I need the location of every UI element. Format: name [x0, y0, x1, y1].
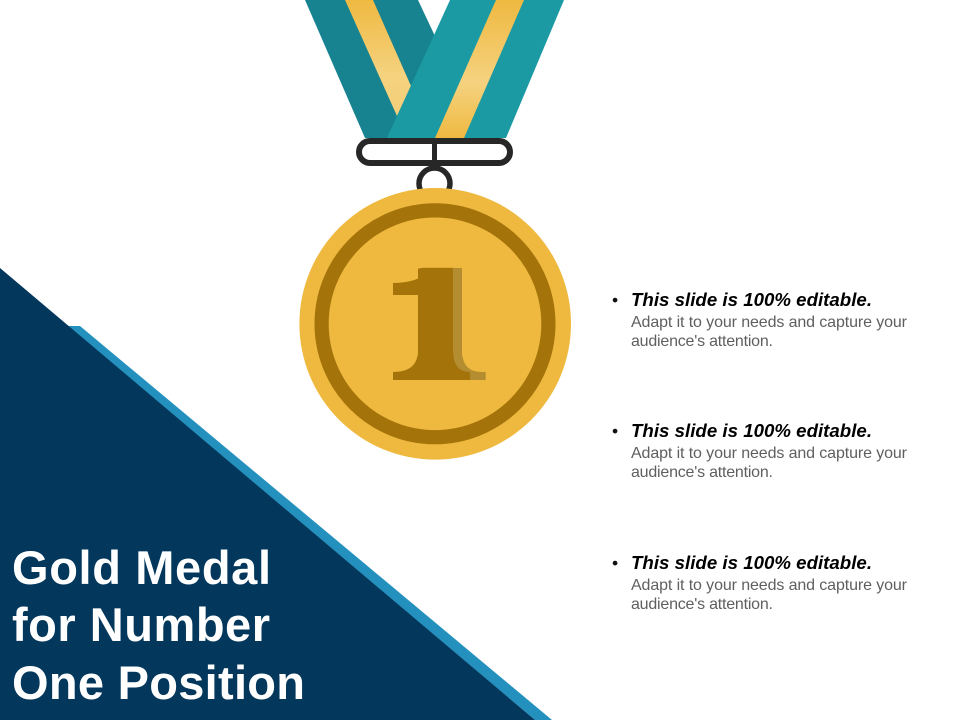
bullet item 1: •	[612, 290, 618, 310]
bullet item 2: •	[612, 421, 618, 441]
ribbon: front strap	[387, 0, 564, 138]
bullet item 3	[612, 552, 908, 613]
background corner panel	[0, 268, 552, 720]
bullet item 1: This slide is 100% editable.	[631, 289, 872, 310]
bullet item 3: audience's attention.	[631, 596, 773, 613]
bullet item 2	[612, 420, 908, 481]
bullet item 3: This slide is 100% editable.	[631, 552, 872, 573]
number one	[393, 268, 486, 380]
medal disc	[299, 188, 571, 460]
ribbon back gold stripe	[345, 0, 411, 116]
title: One Position	[12, 656, 305, 709]
clasp bar	[359, 141, 510, 166]
bullet item 1	[612, 289, 908, 350]
title: Gold Medal	[12, 541, 271, 594]
bullet item 1: audience's attention.	[631, 333, 773, 350]
bullet item 2: audience's attention.	[631, 464, 773, 481]
number one: 1	[374, 241, 495, 412]
bullet list	[612, 289, 908, 613]
clasp ring	[419, 168, 450, 199]
number one: 1	[374, 241, 495, 412]
ribbon: back strap	[305, 0, 440, 138]
light blue accent band	[68, 326, 552, 720]
dark navy triangle	[0, 268, 535, 720]
title: for Number	[12, 598, 270, 651]
bullet item 3: •	[612, 553, 618, 573]
ribbon front gold stripe	[435, 0, 524, 138]
bullet item 2: Adapt it to your needs and capture your	[631, 445, 908, 462]
medal icon	[299, 0, 571, 460]
bullet item 1: Adapt it to your needs and capture your	[631, 314, 908, 331]
bullet item 3: Adapt it to your needs and capture your	[631, 577, 908, 594]
bullet item 2: This slide is 100% editable.	[631, 420, 872, 441]
medal inner ring	[322, 210, 548, 437]
